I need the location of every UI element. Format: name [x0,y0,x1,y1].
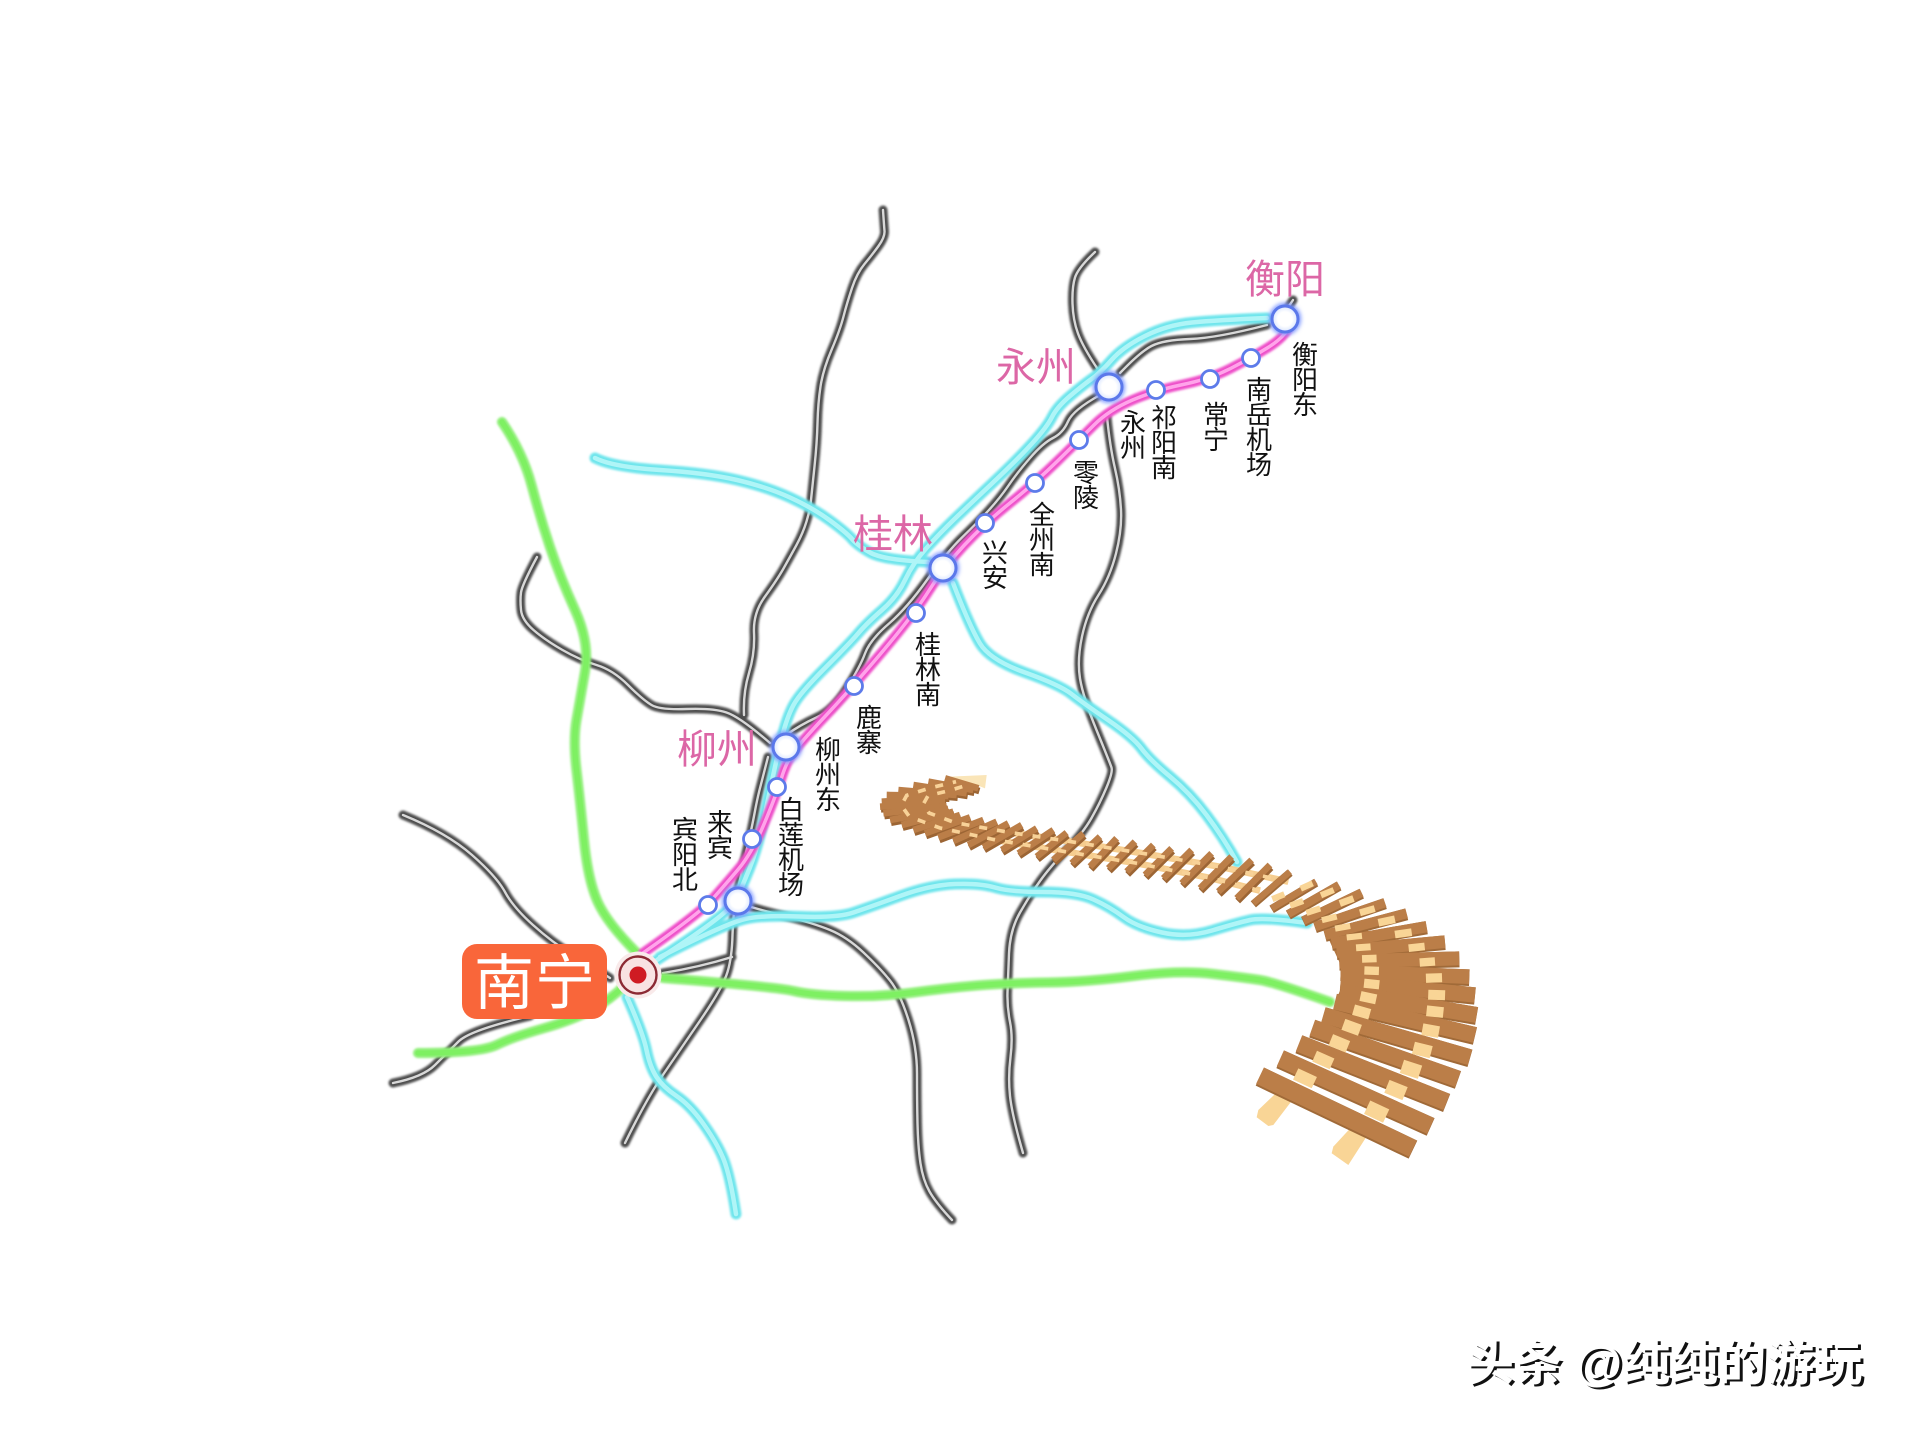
station name labels: 来 [707,808,733,838]
station name labels: 南 [1246,375,1272,405]
station name labels: 莲 [778,820,804,850]
station name labels: 东 [815,785,841,815]
city labels [677,258,1325,772]
Nanning label: 南宁 [474,950,596,1017]
city labels: 柳州 [677,728,757,772]
station name labels: 零 [1073,458,1099,488]
sleepers near section tops [1253,872,1477,1149]
station name labels: 州 [1029,525,1055,555]
station name labels: 州 [815,760,841,790]
station name labels: 鹿 [856,703,882,733]
station markers: major [725,306,1298,914]
station name labels: 寨 [856,728,882,758]
city labels: 桂林 [853,513,933,557]
rail stubs at track front [1257,1089,1369,1165]
station name labels: 永 [1120,408,1146,438]
station name labels: 陵 [1073,483,1099,513]
station name labels [672,340,1318,900]
Nanning station marker [614,952,662,998]
station markers: small [700,350,1260,914]
station name labels: 全 [1029,500,1055,530]
station name labels: 兴 [982,538,1008,568]
station name labels: 阳 [1151,428,1177,458]
station name labels: 场 [1246,450,1272,480]
city labels: 衡阳 [1245,258,1325,302]
station name labels: 岳 [1246,400,1272,430]
sleepers near section sides [1253,873,1477,1150]
fused sleeper fan at the bend [1328,927,1407,1012]
station name labels: 祁 [1151,403,1177,433]
magenta main line Nanning to Hengyang [643,325,1290,953]
station name labels: 常 [1203,400,1229,430]
station name labels: 宾 [672,815,698,845]
gray railway lines [393,210,1293,1220]
station name labels: 机 [1246,425,1272,455]
sleepers far section [880,778,1270,898]
watermark: 头条 @纯纯的游玩 [1466,1338,1862,1391]
station name labels: 机 [778,845,804,875]
station name labels: 东 [1292,390,1318,420]
rail patches on far sleepers [901,782,1288,891]
track rails beneath sleepers [901,782,1288,891]
station name labels: 阳 [672,840,698,870]
station name labels: 白 [778,795,804,825]
station name labels: 南 [1151,453,1177,483]
station name labels: 南 [1029,550,1055,580]
station name labels: 宾 [707,833,733,863]
station name labels: 柳 [815,735,841,765]
city labels: 永州 [996,346,1076,390]
station name labels: 州 [1120,433,1146,463]
3D railway track illustration [880,775,1477,1165]
rail blocks on near sleepers [1271,881,1445,1123]
station name labels: 场 [778,870,804,900]
station name labels: 林 [915,655,941,685]
station name labels: 宁 [1203,425,1229,455]
cyan railway lines [595,318,1307,1214]
station name labels: 阳 [1292,365,1318,395]
station name labels: 南 [915,680,941,710]
station name labels: 北 [672,865,698,895]
station name labels: 衡 [1292,340,1318,370]
station name labels: 桂 [915,630,941,660]
far rail tip [950,775,987,788]
green railway lines [418,422,1330,1053]
sleepers far section shadow [881,781,1271,901]
station name labels: 安 [982,563,1008,593]
